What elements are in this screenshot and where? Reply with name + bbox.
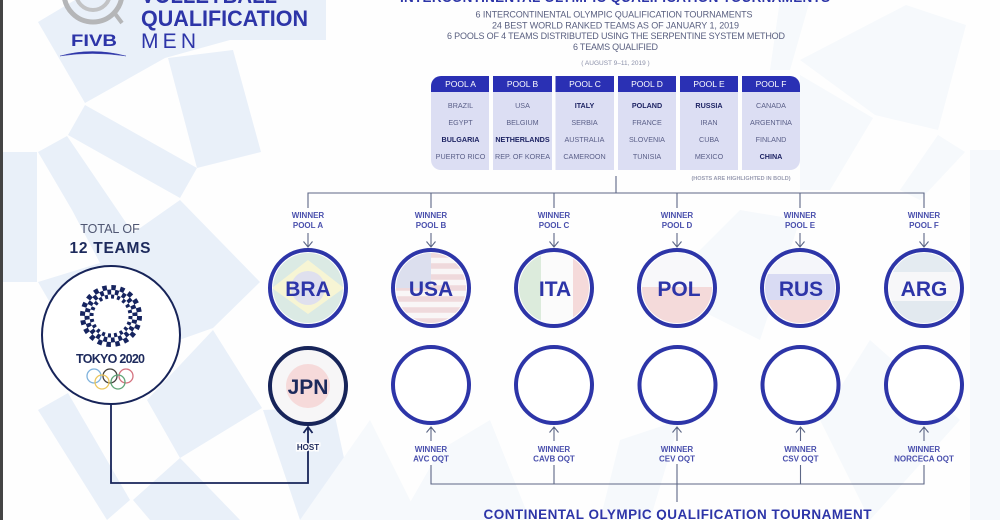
pool D: POLAND <box>632 101 662 110</box>
team: Japan host <box>270 348 346 424</box>
pool E: POOL E <box>693 79 725 89</box>
pool F: FINLAND <box>756 135 786 144</box>
pool C: AUSTRALIA <box>565 135 605 144</box>
pool E: RUSSIA <box>695 101 723 110</box>
icon: Tokyo emblem <box>82 288 140 344</box>
pool B: POOL B <box>507 79 538 89</box>
pool C: CAMEROON <box>563 152 606 161</box>
logo: FIVB <box>60 0 126 56</box>
bracket: continental winners <box>426 427 928 502</box>
pool winner labels: POOL F <box>909 221 939 230</box>
pool B: NETHERLANDS <box>495 135 550 144</box>
total heading <box>70 222 150 257</box>
tournament description: 6 POOLS OF 4 TEAMS DISTRIBUTED USING THE SERPENTINE SYSTEM METHOD <box>447 31 786 41</box>
pool C: POOL C <box>569 79 601 89</box>
pool winner labels: WINNER <box>908 211 940 220</box>
pool A: EGYPT <box>448 118 473 127</box>
pool C: SERBIA <box>571 118 598 127</box>
team: Brazil <box>270 250 346 326</box>
connector: host line <box>111 404 312 483</box>
total heading: TOTAL OF <box>80 222 140 236</box>
team: Italy: ITA <box>539 278 571 301</box>
pool winner labels: POOL A <box>293 221 323 230</box>
continental winner labels: NORCECA OQT <box>894 454 954 464</box>
total heading: 12 TEAMS <box>70 240 150 257</box>
empty slots for continental winners <box>393 347 962 423</box>
pools table <box>431 76 800 170</box>
continental winner labels: AVC OQT <box>413 454 449 464</box>
pool A: BRAZIL <box>448 101 473 110</box>
continental winner labels: WINNER <box>538 445 570 454</box>
tournament description: 6 INTERCONTINENTAL OLYMPIC QUALIFICATION TOURNAMENTS <box>476 10 752 20</box>
pool B <box>493 76 552 170</box>
pool winner labels <box>292 211 940 230</box>
team: USA <box>393 250 469 326</box>
title <box>141 0 308 53</box>
pool winner labels: POOL C <box>539 221 569 230</box>
team: Argentina <box>886 250 962 326</box>
team: Italy <box>516 250 593 326</box>
pool C <box>556 76 614 170</box>
pool E: IRAN <box>700 118 718 127</box>
pool winner labels: WINNER <box>415 211 447 220</box>
pool A: POOL A <box>445 79 476 89</box>
pool winner labels: WINNER <box>784 211 816 220</box>
pool winner labels: WINNER <box>661 211 693 220</box>
continental winner labels: CSV OQT <box>782 454 819 464</box>
pool winner labels: WINNER <box>292 211 324 220</box>
pool winner labels: POOL E <box>785 221 816 230</box>
logo: FIVB: FIVB <box>71 32 117 50</box>
team: USA: USA <box>409 278 453 301</box>
tournament description: 6 TEAMS QUALIFIED <box>573 42 658 52</box>
team: Russia: RUS <box>779 278 823 301</box>
continental winner labels: WINNER <box>661 445 693 454</box>
continental winner labels: WINNER <box>415 445 447 454</box>
continental winner labels: WINNER <box>908 445 940 454</box>
left window edge <box>0 0 3 520</box>
hosts note: (HOSTS ARE HIGHLIGHTED IN BOLD) <box>691 176 791 182</box>
title: QUALIFICATION <box>141 6 308 31</box>
pool D: SLOVENIA <box>629 135 665 144</box>
host label: HOST <box>297 443 319 452</box>
team: Argentina: ARG <box>901 278 947 301</box>
pool B: USA <box>515 101 530 110</box>
pool F: CHINA <box>760 152 782 161</box>
pool F: POOL F <box>756 79 786 89</box>
pool winner labels: WINNER <box>538 211 570 220</box>
tournament description <box>447 10 786 52</box>
pool A: BULGARIA <box>442 135 479 144</box>
pool D: TUNISIA <box>633 152 661 161</box>
pool E: MEXICO <box>695 152 724 161</box>
pool B: REP. OF KOREA <box>495 152 550 161</box>
pool C: ITALY <box>575 101 594 110</box>
pool F <box>742 76 800 170</box>
date: ( AUGUST 9–11, 2019 ) <box>581 60 650 67</box>
pool E <box>680 76 738 170</box>
pool D: FRANCE <box>632 118 662 127</box>
pool A <box>431 76 489 170</box>
pool winner labels: POOL D <box>662 221 692 230</box>
pool F: ARGENTINA <box>750 118 792 127</box>
pool winner labels: POOL B <box>416 221 446 230</box>
pool D <box>618 76 676 170</box>
team: Brazil: BRA <box>285 278 331 301</box>
continental winner labels <box>413 445 954 464</box>
title: MEN <box>141 30 196 53</box>
pool F: CANADA <box>756 101 786 110</box>
bracket: pools to winners <box>304 176 928 247</box>
Tokyo 2020 badge <box>42 266 180 404</box>
continental winner labels: WINNER <box>784 445 817 454</box>
Tokyo 2020 badge: TOKYO 2020 <box>76 352 145 366</box>
team: Poland <box>639 250 715 326</box>
team: Poland: POL <box>657 278 701 301</box>
icon: Olympic rings <box>87 369 133 389</box>
team: Japan host: JPN <box>288 376 328 399</box>
pool D: POOL D <box>631 79 663 89</box>
team: Russia <box>762 250 838 326</box>
pool E: CUBA <box>699 135 719 144</box>
pool B: BELGIUM <box>506 118 539 127</box>
continental winner labels: CEV OQT <box>659 454 695 464</box>
tournament description: 24 BEST WORLD RANKED TEAMS AS OF JANUARY 1, 2019 <box>492 20 739 30</box>
pool A: PUERTO RICO <box>436 152 486 161</box>
continental winner labels: CAVB OQT <box>533 454 575 464</box>
